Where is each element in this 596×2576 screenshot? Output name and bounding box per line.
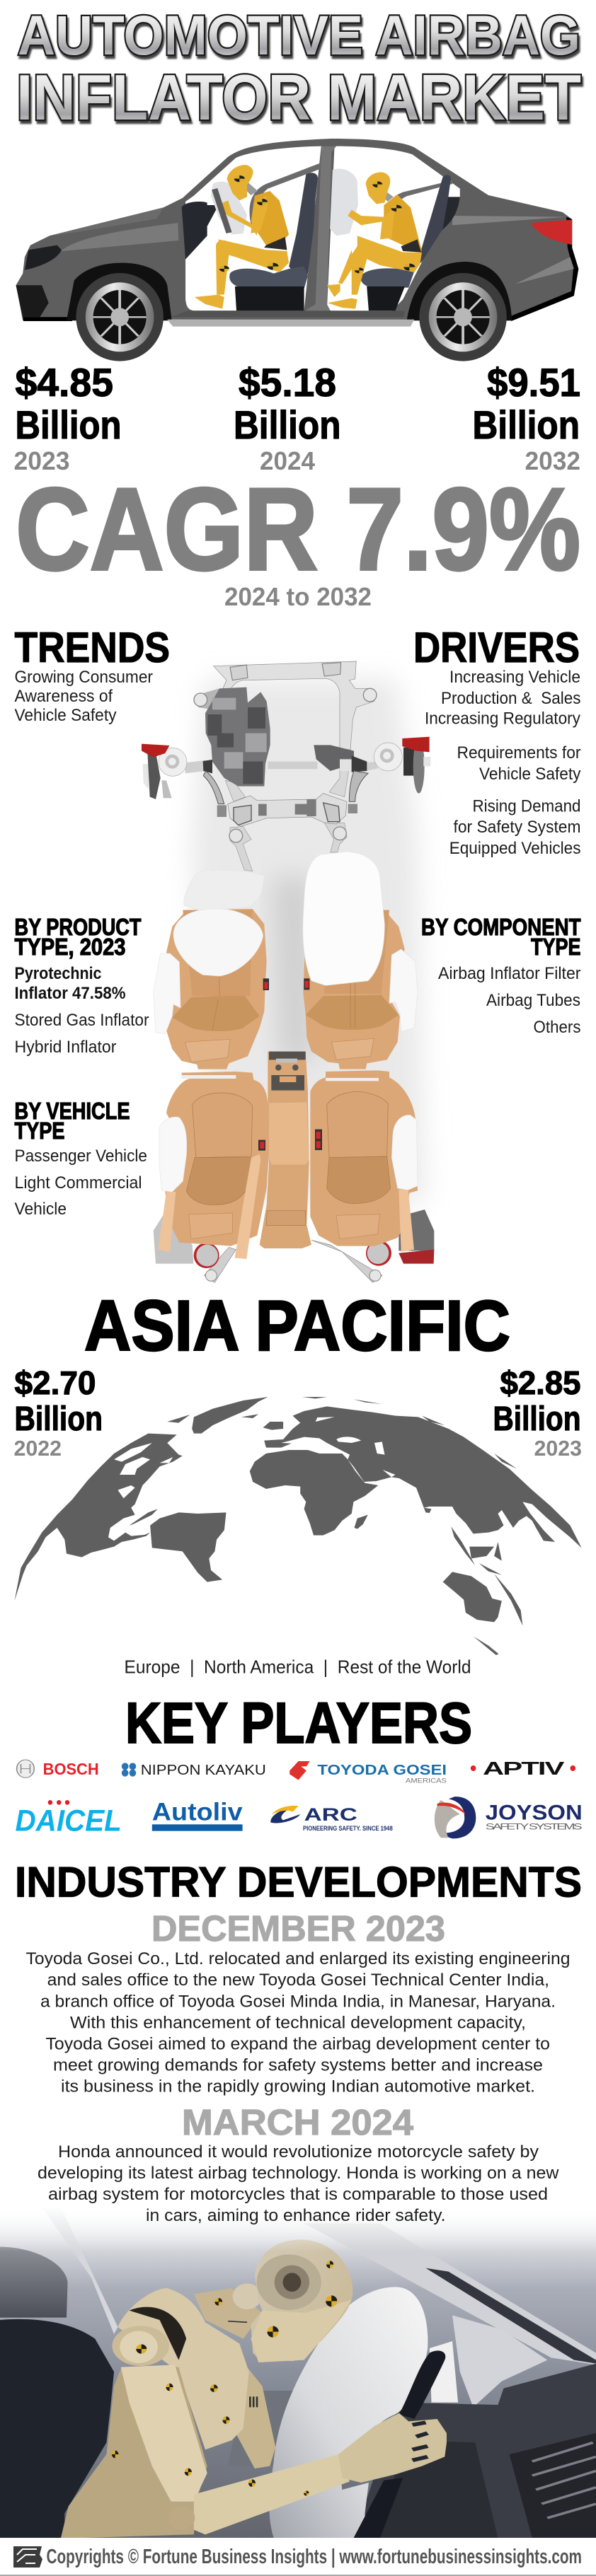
december 2023 development: a branch office of Toyoda Gosei Minda India, in Manesar, Haryana. bbox=[40, 1992, 556, 2012]
headlight bbox=[25, 245, 62, 270]
front chassis bbox=[142, 661, 430, 871]
by component type: Others bbox=[534, 1018, 580, 1037]
southeast asia islands bbox=[424, 1508, 522, 1625]
drivers: Increasing Vehicle bbox=[449, 668, 580, 687]
subframe crossmember bbox=[217, 794, 357, 871]
december 2023 development: With this enhancement of technical development capacity, bbox=[70, 2013, 526, 2033]
march 2024 development bbox=[38, 2102, 559, 2225]
seats bbox=[289, 173, 451, 285]
dummy rear bbox=[327, 173, 422, 309]
front right seat bbox=[303, 910, 405, 1069]
seat bbox=[0, 2319, 114, 2538]
drivers: Vehicle Safety bbox=[479, 765, 580, 784]
logo: arc: PIONEERING SAFETY. SINCE 1948 bbox=[303, 1825, 393, 1832]
collar bbox=[194, 2288, 263, 2339]
left pillar bbox=[42, 2207, 118, 2334]
by product type: Stored Gas Inflator bbox=[14, 1011, 149, 1030]
december 2023 development: Toyoda Gosei aimed to expand the airbag development center to bbox=[45, 2034, 550, 2054]
december 2023 development bbox=[25, 1908, 571, 2096]
logo: autoliv bbox=[152, 1798, 243, 1831]
greenland bbox=[192, 1397, 268, 1434]
upper arm bbox=[121, 2365, 207, 2502]
by vehicle type: Vehicle bbox=[14, 1200, 67, 1219]
key players heading: KEY PLAYERS bbox=[125, 1691, 472, 1756]
logo: arc bbox=[270, 1805, 393, 1832]
march 2024 development: in cars, aiming to enhance rider safety. bbox=[146, 2206, 446, 2225]
value right 2023: 2023 bbox=[534, 1436, 582, 1461]
market values left 2023: $4.85 bbox=[16, 360, 113, 405]
industry developments heading: INDUSTRY DEVELOPMENTS bbox=[15, 1859, 582, 1905]
rear chassis bbox=[154, 1209, 434, 1282]
key player logos bbox=[15, 1758, 583, 1838]
march 2024 development: airbag system for motorcycles that is comparable to those used bbox=[48, 2185, 548, 2204]
cagr: 2024 to 2032 bbox=[224, 582, 372, 611]
by vehicle type: Passenger Vehicle bbox=[14, 1147, 147, 1166]
by vehicle type: TYPE bbox=[14, 1118, 65, 1144]
image: robot crash dummy and airbag bbox=[0, 2207, 596, 2538]
lower body bbox=[61, 2367, 207, 2538]
rear right seat bbox=[310, 1070, 418, 1246]
illustration: car with crash test dummies bbox=[16, 139, 578, 361]
by vehicle type: Light Commercial bbox=[14, 1173, 142, 1193]
logo: nippon kayaku: NIPPON KAYAKU bbox=[141, 1761, 266, 1777]
market values right 2032: $9.51 bbox=[487, 360, 580, 405]
footer bbox=[0, 2538, 596, 2576]
drivers: Production & Sales bbox=[441, 689, 580, 708]
december 2023 development: Toyoda Gosei Co., Ltd. relocated and enlarged its existing engineering bbox=[25, 1949, 571, 1968]
december 2023 development: DECEMBER 2023 bbox=[151, 1908, 445, 1949]
b pillar bbox=[304, 146, 336, 311]
value left 2022: Billion bbox=[14, 1400, 103, 1438]
north america bbox=[14, 1434, 183, 1601]
seatbelts bbox=[249, 163, 452, 228]
left hub and brake bbox=[142, 744, 187, 799]
logo: daicel bbox=[15, 1800, 122, 1838]
drivers: Equipped Vehicles bbox=[449, 839, 580, 858]
deployed airbags bbox=[173, 852, 384, 985]
door trim bbox=[452, 2315, 547, 2407]
market values left 2023 bbox=[14, 360, 122, 475]
soft background shadow bbox=[191, 679, 425, 1202]
dummy front bbox=[195, 165, 289, 309]
icon: fortune business insights logo bbox=[13, 2546, 42, 2568]
value right 2023 bbox=[493, 1364, 582, 1461]
logo: daicel: DAICEL bbox=[15, 1804, 122, 1838]
march 2024 development: developing its latest airbag technology. Honda is working on a new bbox=[38, 2164, 559, 2183]
illustration: chassis, seats and airbags bbox=[142, 661, 434, 1282]
value right 2023: Billion bbox=[493, 1400, 580, 1438]
side skirt bbox=[167, 320, 414, 327]
by product type: Inflator 47.58% bbox=[14, 984, 126, 1003]
torso bbox=[118, 2288, 249, 2449]
white inland seas bbox=[114, 1417, 384, 1498]
new zealand bbox=[474, 1636, 499, 1655]
africa bbox=[250, 1450, 378, 1536]
far arm bbox=[236, 2357, 275, 2468]
by product type: Pyrotechnic bbox=[14, 964, 102, 983]
asia pacific heading: ASIA PACIFIC bbox=[84, 1287, 510, 1366]
logo: toyoda gosei: TOYODA GOSEI bbox=[317, 1762, 447, 1777]
front left seat bbox=[166, 909, 267, 1069]
value left 2022: $2.70 bbox=[14, 1364, 96, 1401]
shoulder bbox=[130, 2307, 186, 2360]
markings bbox=[228, 2321, 257, 2407]
market values middle 2024: Billion bbox=[234, 402, 341, 447]
madagascar bbox=[354, 1515, 368, 1529]
logo: nippon kayaku bbox=[122, 1761, 266, 1777]
drivers: for Safety System bbox=[453, 818, 580, 837]
wheel arches bbox=[67, 262, 512, 320]
door sill bbox=[171, 311, 405, 317]
side airbags bbox=[154, 949, 418, 1192]
cuba bbox=[130, 1509, 158, 1526]
taillight bbox=[530, 220, 572, 245]
airbag bbox=[269, 2287, 428, 2538]
by vehicle type: BY VEHICLE bbox=[14, 1098, 130, 1124]
december 2023 development: meet growing demands for safety systems better and increase bbox=[53, 2055, 543, 2075]
logo: bosch: BOSCH bbox=[43, 1760, 99, 1778]
eurasia bbox=[264, 1406, 582, 1548]
by component type: TYPE bbox=[531, 934, 580, 960]
red buckles bbox=[258, 978, 322, 1151]
other regions: Europe | North America | Rest of the World bbox=[125, 1657, 471, 1678]
drivers: Requirements for bbox=[457, 743, 581, 762]
air vents bbox=[510, 2433, 596, 2538]
market values right 2032: Billion bbox=[473, 402, 580, 447]
market values middle 2024: $5.18 bbox=[239, 360, 336, 405]
arctic islands bbox=[167, 1397, 517, 1469]
front grille bbox=[16, 285, 49, 317]
trends: Awareness of bbox=[14, 687, 113, 706]
logo: aptiv: APTIV bbox=[483, 1758, 564, 1779]
a pillar bbox=[304, 2223, 596, 2365]
march 2024 development: MARCH 2024 bbox=[182, 2102, 414, 2142]
steering wheel bbox=[353, 2350, 445, 2538]
dashboard bbox=[353, 2364, 596, 2538]
robot dummy bbox=[61, 2240, 447, 2538]
trends: Vehicle Safety bbox=[14, 706, 116, 725]
white fade bbox=[0, 2207, 596, 2251]
by product type: BY PRODUCT bbox=[14, 914, 142, 940]
logo: autoliv: Autoliv bbox=[152, 1798, 243, 1826]
by component type: Airbag Inflator Filter bbox=[438, 964, 580, 983]
market values right 2032 bbox=[473, 360, 580, 475]
by component type bbox=[421, 914, 580, 1037]
market values left 2023: 2023 bbox=[14, 446, 69, 475]
december 2023 development: and sales office to the new Toyoda Gosei Technical Center India, bbox=[47, 1971, 549, 1990]
trends bbox=[14, 624, 170, 725]
by product type: Hybrid Inflator bbox=[14, 1038, 117, 1057]
belts bbox=[158, 1154, 414, 1259]
market values middle 2024 bbox=[234, 360, 341, 475]
by product type: TYPE, 2023 bbox=[14, 934, 126, 960]
engine bbox=[205, 687, 270, 787]
march 2024 development: Honda announced it would revolutionize motorcycle safety by bbox=[58, 2142, 539, 2162]
logo: toyoda gosei bbox=[290, 1761, 447, 1785]
market values middle 2024: 2024 bbox=[260, 446, 315, 475]
logo: toyoda gosei: AMERICAS bbox=[406, 1777, 447, 1785]
logo: joyson bbox=[435, 1797, 583, 1838]
australia bbox=[443, 1572, 502, 1622]
rear left seat bbox=[165, 1072, 269, 1246]
drivers: Increasing Regulatory bbox=[425, 709, 580, 729]
value left 2022 bbox=[14, 1364, 103, 1461]
world map bbox=[14, 1397, 582, 1655]
british isles bbox=[263, 1422, 283, 1430]
head bbox=[251, 2240, 353, 2362]
by product type bbox=[14, 914, 149, 1057]
by vehicle type bbox=[14, 1098, 147, 1219]
logo: joyson: SAFETY SYSTEMS bbox=[486, 1822, 583, 1832]
front wheel bbox=[76, 273, 164, 361]
rear wheel bbox=[419, 273, 507, 361]
door interior panels bbox=[182, 197, 460, 260]
title bbox=[16, 4, 581, 134]
market values left 2023: Billion bbox=[16, 402, 122, 447]
rear cabin opening bbox=[327, 146, 460, 311]
seats bbox=[154, 909, 434, 1282]
airbags bbox=[211, 169, 358, 236]
centre console bbox=[260, 1052, 311, 1248]
market values right 2032: 2032 bbox=[525, 446, 580, 475]
trends: TRENDS bbox=[14, 624, 170, 671]
value left 2022: 2022 bbox=[14, 1436, 62, 1461]
floor and view below chin bbox=[228, 2391, 304, 2466]
december 2023 development: its business in the rapidly growing Indian automotive market. bbox=[61, 2077, 535, 2096]
drivers bbox=[413, 624, 581, 858]
logo: arc: ARC bbox=[304, 1805, 357, 1825]
front cabin opening bbox=[185, 146, 321, 311]
right hub and brake bbox=[374, 737, 430, 794]
forearm bbox=[194, 2454, 350, 2534]
logo: bosch bbox=[17, 1760, 99, 1778]
by component type: Airbag Tubes bbox=[486, 991, 580, 1010]
trends: Growing Consumer bbox=[14, 668, 153, 687]
drivers: Rising Demand bbox=[473, 796, 580, 816]
hand bbox=[338, 2413, 447, 2483]
left and right half-shafts and axle bbox=[185, 760, 377, 773]
value right 2023: $2.85 bbox=[500, 1364, 580, 1401]
south america bbox=[150, 1512, 227, 1582]
